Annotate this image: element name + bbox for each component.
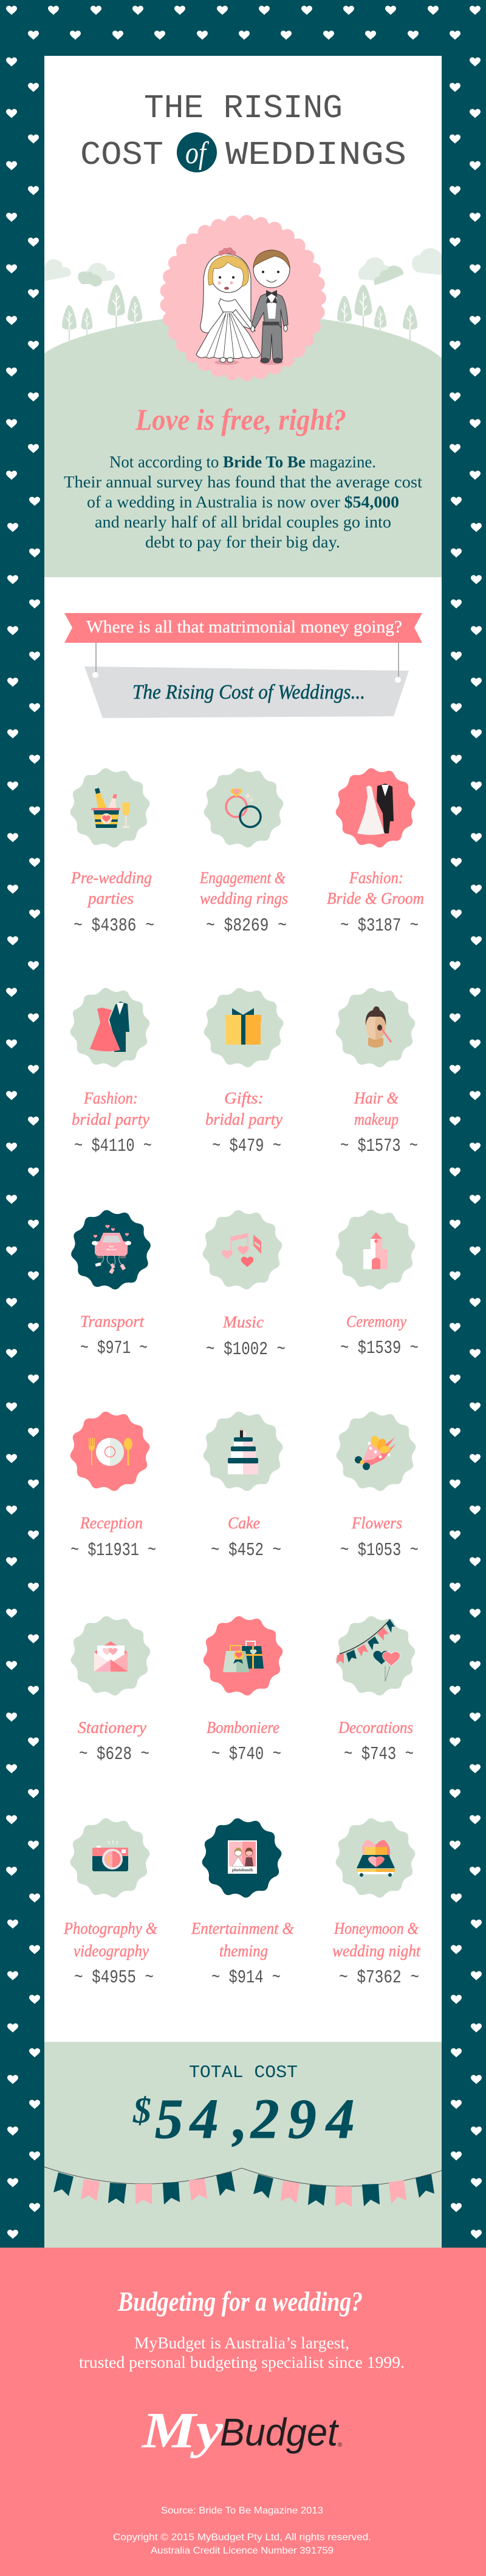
badge	[336, 1210, 415, 1289]
item: engagement and wedding rings	[199, 768, 288, 937]
logo: MyBudget: Budget	[220, 2410, 339, 2454]
item: cake	[204, 1412, 282, 1561]
icon: bouquet	[355, 1434, 396, 1470]
label: theming	[219, 1942, 268, 1960]
icon: gift bags	[223, 1641, 264, 1672]
panel: total cost	[44, 2042, 442, 2248]
label: Music	[222, 1313, 264, 1331]
scalloped pink circle	[164, 219, 322, 377]
badge	[336, 768, 415, 847]
icon: wedding cake	[228, 1428, 258, 1474]
icon: just married car	[92, 1225, 131, 1274]
item: fashion bride and groom	[327, 768, 424, 937]
item: honeymoon and wedding night	[332, 1818, 421, 1988]
amount: ~ $452 ~	[211, 1540, 281, 1561]
label: Honeymoon &	[334, 1919, 419, 1937]
label: Flowers	[351, 1514, 402, 1532]
item: reception	[70, 1412, 156, 1561]
label: Pre-wedding	[70, 869, 152, 887]
badge	[204, 988, 283, 1067]
title: WEDDINGS	[225, 136, 406, 174]
source and copyright: Australia Credit Licence Number 391759	[151, 2546, 334, 2556]
amount: ~ $743 ~	[344, 1744, 414, 1765]
banner: question ribbon: Where is all that matrimonial money going?	[86, 617, 402, 637]
icon: camera	[92, 1840, 128, 1871]
total cost figure: $	[132, 2090, 151, 2130]
item: pre-wedding parties	[70, 768, 154, 937]
amount: ~ $971 ~	[80, 1338, 148, 1359]
label: bridal party	[72, 1110, 149, 1128]
amount: ~ $1053 ~	[340, 1540, 419, 1561]
label: videography	[74, 1942, 149, 1960]
label: Photography &	[63, 1919, 157, 1937]
badge	[70, 768, 149, 847]
label	[199, 869, 288, 907]
label: Bomboniere	[207, 1718, 279, 1737]
badge	[70, 988, 149, 1067]
footer panel	[0, 2248, 486, 2576]
label: bridal party	[205, 1110, 282, 1128]
label: Ceremony	[346, 1312, 406, 1330]
source and copyright: Source: Bride To Be Magazine 2013	[161, 2506, 323, 2516]
label: Decorations	[338, 1718, 413, 1737]
amount: ~ $914 ~	[211, 1967, 281, 1988]
icon: champagne bucket	[91, 788, 130, 828]
label: Transport	[80, 1312, 145, 1330]
icon: dress and suit	[357, 784, 394, 835]
hanging sign: The Rising Cost of Weddings...	[132, 681, 365, 703]
panel: white content sheet	[44, 56, 442, 2248]
logo: MyBudget: My	[141, 2402, 224, 2459]
item: stationery	[71, 1616, 150, 1765]
amount: ~ $3187 ~	[340, 915, 419, 937]
source and copyright: Copyright © 2015 MyBudget Pty Ltd, All rights reserved.	[113, 2532, 371, 2543]
logo: MyBudget	[141, 2402, 343, 2459]
item: music	[203, 1210, 286, 1360]
amount: ~ $11931 ~	[70, 1540, 156, 1561]
intro paragraph	[64, 453, 423, 551]
label: Cake	[228, 1514, 260, 1532]
clouds	[44, 248, 442, 286]
icon: just married car: Married	[106, 1248, 117, 1251]
title: of	[185, 136, 210, 171]
amount: ~ $4386 ~	[74, 915, 154, 937]
bunting	[44, 2167, 442, 2207]
amount: ~ $479 ~	[212, 1136, 281, 1157]
label	[63, 1919, 157, 1960]
label	[332, 1919, 421, 1960]
label: Gifts:	[224, 1089, 264, 1107]
source and copyright	[113, 2506, 371, 2556]
footer description: trusted personal budgeting specialist since 1999.	[79, 2353, 405, 2371]
title: THE RISING	[144, 89, 343, 127]
icon: face and brush	[366, 1006, 391, 1048]
item: gifts bridal party	[204, 988, 283, 1157]
total cost heading: TOTAL COST	[189, 2062, 298, 2083]
amount: ~ $1539 ~	[340, 1338, 419, 1359]
label: makeup	[354, 1110, 399, 1128]
intro paragraph: of a wedding in Australia is now over $54,000	[87, 493, 399, 511]
icon: rings	[226, 788, 261, 827]
amount: ~ $740 ~	[211, 1744, 281, 1765]
label: Fashion:	[349, 869, 403, 887]
badge	[204, 768, 283, 847]
footer description	[79, 2334, 405, 2371]
intro paragraph: and nearly half of all bridal couples go into	[95, 513, 391, 531]
label	[72, 1089, 149, 1128]
amount: ~ $4110 ~	[74, 1136, 152, 1157]
icon: envelope	[94, 1641, 128, 1672]
item: fashion bridal party	[70, 988, 152, 1157]
intro paragraph: Not according to Bride To Be magazine.	[109, 453, 376, 471]
badge	[336, 1616, 415, 1695]
label: Hair &	[354, 1089, 399, 1107]
badge	[336, 988, 415, 1067]
label: Engagement &	[199, 869, 286, 887]
badge	[202, 1818, 281, 1897]
label: Entertainment &	[191, 1919, 294, 1937]
footer heading: Budgeting for a wedding?	[117, 2286, 363, 2317]
groom	[251, 250, 290, 365]
badge	[337, 1412, 416, 1491]
icon: church	[363, 1228, 388, 1269]
icon: photobooth print: photobooth	[232, 1868, 253, 1873]
label: wedding rings	[200, 889, 288, 907]
badge	[204, 1616, 282, 1695]
item: entertainment and theming	[191, 1818, 294, 1988]
amount: ~ $4955 ~	[74, 1967, 154, 1988]
icon: plate and cutlery	[89, 1438, 132, 1466]
label	[354, 1089, 399, 1128]
label	[205, 1089, 282, 1128]
item: bomboniere	[204, 1616, 282, 1765]
badge	[336, 1818, 415, 1897]
badge	[71, 1210, 151, 1289]
footer description: MyBudget is Australia’s largest,	[134, 2334, 349, 2352]
label: Stationery	[78, 1718, 146, 1737]
label: wedding night	[332, 1942, 421, 1960]
icon: bunting and balloons	[337, 1619, 400, 1681]
icon: just married car: Just	[109, 1245, 114, 1248]
icon: gift box	[225, 1008, 261, 1045]
item: ceremony	[336, 1210, 419, 1359]
label	[191, 1919, 294, 1960]
trees	[62, 285, 417, 341]
item: photography and videography	[63, 1818, 157, 1988]
label	[327, 869, 424, 907]
amount: ~ $628 ~	[79, 1744, 149, 1765]
heading: Love is free, right?: Love is free, right?	[135, 402, 346, 436]
logo: MyBudget: ®	[338, 2442, 343, 2449]
icon: photobooth print	[228, 1840, 257, 1874]
amount: ~ $7362 ~	[339, 1967, 419, 1988]
label: parties	[87, 889, 134, 907]
label: Reception	[80, 1514, 143, 1532]
intro paragraph: Their annual survey has found that the average cost	[64, 473, 423, 491]
item: transport	[71, 1210, 151, 1359]
label: Bride & Groom	[327, 889, 424, 907]
item: flowers	[337, 1412, 419, 1561]
amount: ~ $1002 ~	[206, 1339, 286, 1360]
badge	[204, 1412, 282, 1491]
bride	[196, 248, 261, 365]
item: decorations	[336, 1616, 415, 1765]
badge	[70, 1818, 149, 1897]
total cost figure: 54,294	[155, 2088, 355, 2151]
badge	[70, 1412, 149, 1491]
amount: ~ $1573 ~	[340, 1136, 418, 1157]
amount: ~ $8269 ~	[206, 915, 287, 937]
hanging sign	[84, 643, 409, 718]
hero scene: landscape and couple	[44, 219, 442, 577]
banner: question ribbon	[64, 613, 422, 643]
badge	[203, 1210, 282, 1289]
item: hair and makeup	[336, 988, 418, 1157]
green hill	[44, 313, 442, 577]
label: Fashion:	[83, 1089, 138, 1107]
icon: bed with heart	[357, 1840, 395, 1877]
intro paragraph: debt to pay for their big day.	[145, 533, 340, 551]
title	[80, 89, 406, 174]
badge	[71, 1616, 150, 1695]
label	[70, 869, 152, 907]
icon: music notes with hearts	[222, 1233, 261, 1267]
icon: bridesmaid dress and suit	[90, 1002, 129, 1052]
title: COST	[80, 136, 163, 174]
